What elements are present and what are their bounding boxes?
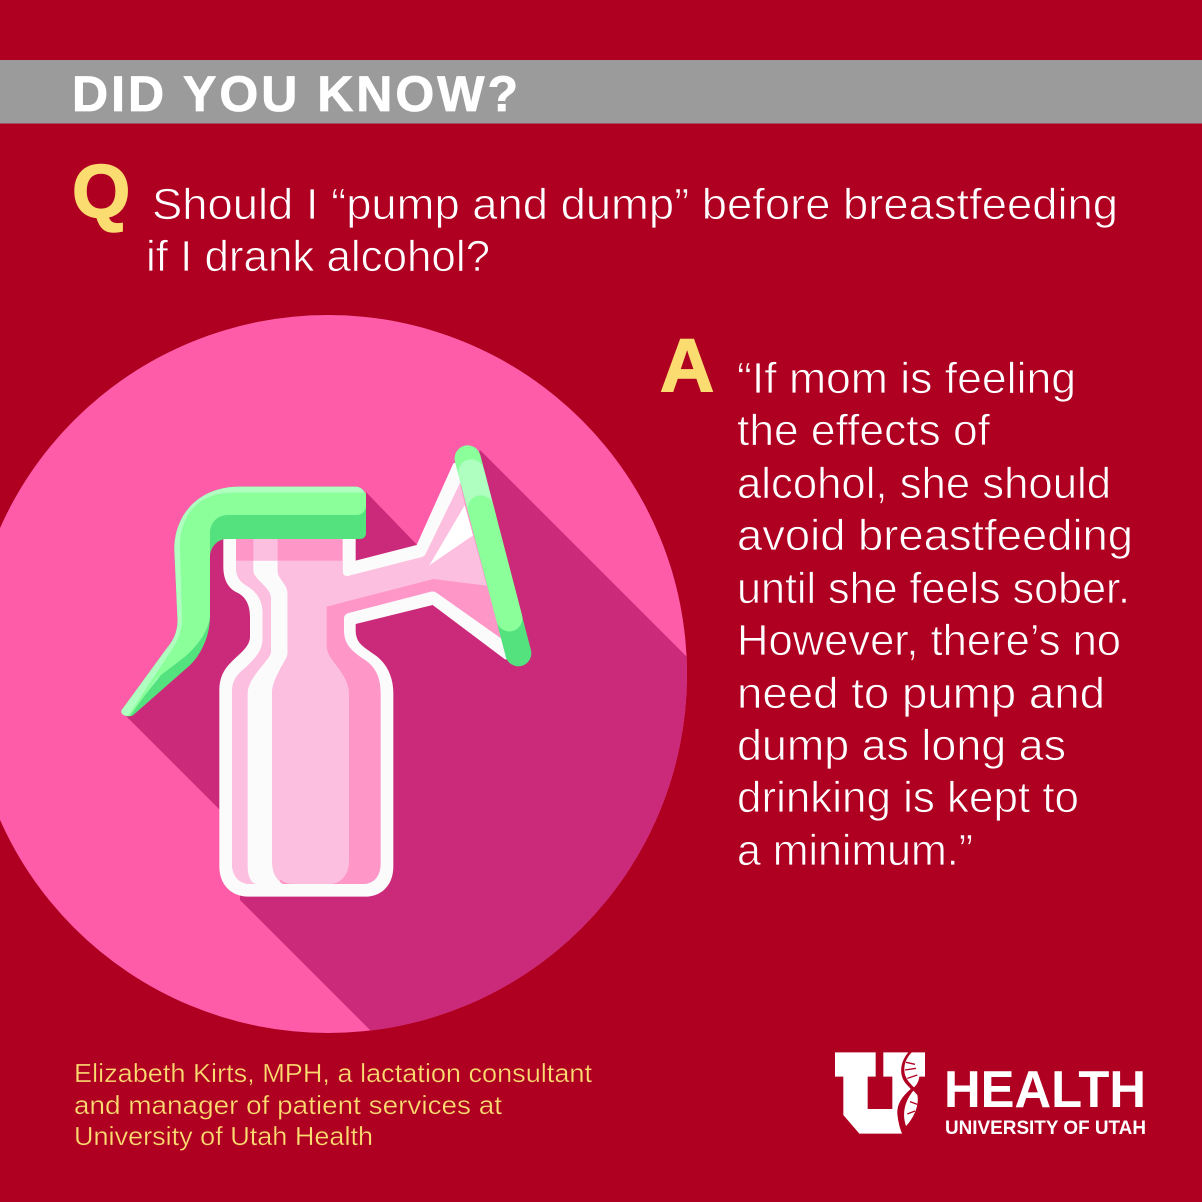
question	[72, 149, 1118, 281]
answer: until she feels sober.	[737, 564, 1130, 613]
attribution	[74, 1058, 593, 1151]
flange: dark green base	[468, 458, 518, 653]
answer: drinking is kept to	[737, 773, 1079, 822]
header banner	[0, 60, 1202, 124]
handle: light edge	[121, 487, 366, 716]
cap collar light	[253, 539, 278, 561]
bottle interior	[232, 483, 501, 884]
white funnel highlight	[429, 505, 473, 565]
question: Should I “pump and dump” before breastfeeding	[152, 180, 1118, 229]
header banner: DID YOU KNOW?	[72, 66, 518, 122]
illustration: breast pump in pink circle	[0, 315, 700, 1035]
attribution: and manager of patient services at	[74, 1090, 503, 1120]
answer: need to pump and	[737, 669, 1105, 718]
pump	[121, 458, 518, 897]
logo: University of Utah Health	[835, 1052, 1146, 1139]
answer: A	[660, 323, 714, 407]
logo: University of Utah Health: UNIVERSITY OF UTAH	[945, 1118, 1146, 1139]
question: Q	[72, 149, 130, 233]
attribution: University of Utah Health	[74, 1121, 373, 1151]
icon: block U with DNA	[835, 1052, 925, 1134]
handle: mid green	[128, 493, 366, 716]
answer: “If mom is feeling	[737, 354, 1076, 403]
logo: University of Utah Health: HEALTH	[944, 1061, 1146, 1119]
answer	[660, 323, 1133, 875]
question: if I drank alcohol?	[146, 232, 490, 281]
answer: avoid breastfeeding	[737, 511, 1133, 560]
answer: However, there’s no	[737, 616, 1121, 665]
central light pink	[272, 483, 487, 884]
flange: mid green	[468, 458, 509, 618]
bottle and funnel outline	[219, 460, 517, 897]
light left strip	[232, 561, 280, 884]
long shadow	[125, 450, 700, 1035]
handle: dark green	[121, 487, 366, 716]
flange: highlight	[471, 472, 483, 518]
white strip	[248, 561, 288, 884]
pink circle	[0, 315, 687, 1033]
answer: the effects of	[737, 406, 991, 455]
answer: alcohol, she should	[737, 459, 1111, 508]
attribution: Elizabeth Kirts, MPH, a lactation consultant	[74, 1058, 593, 1088]
answer: a minimum.”	[737, 826, 973, 875]
flange: mid green overlay	[481, 508, 509, 618]
answer: dump as long as	[737, 721, 1066, 770]
